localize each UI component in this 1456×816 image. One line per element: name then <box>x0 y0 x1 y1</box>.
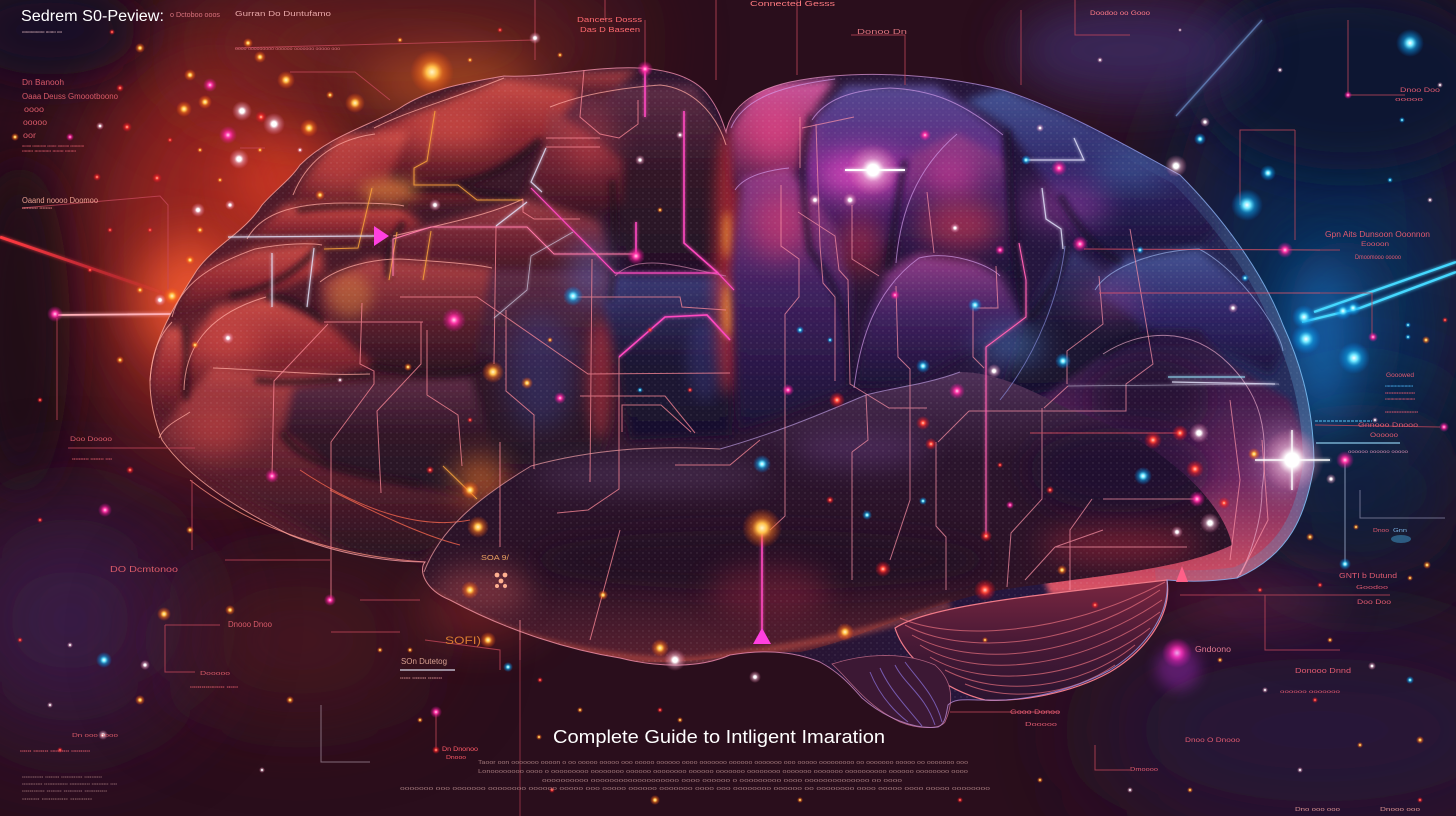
text block: right column: Gnn <box>1393 528 1407 534</box>
text block: right column: Dooooo <box>1025 722 1057 728</box>
text block: left column: oor <box>23 131 36 140</box>
temporal lobe shading <box>430 428 1210 616</box>
text block: right column: Goodoo <box>1356 585 1388 591</box>
text block: top labels: Dancers Dosss <box>577 17 643 24</box>
arrow: bottom up marker <box>753 628 771 644</box>
text block: bottom left lines <box>22 774 118 801</box>
left hemisphere glows <box>179 104 742 504</box>
text block: right column: oooooooooo <box>1385 383 1414 388</box>
text block: right column: Gnnooo Dnooo <box>1358 423 1419 429</box>
nodes: left field <box>11 27 803 805</box>
brain silhouette <box>150 68 1314 727</box>
text block: left column: ooo oooo ooooo ooooo <box>20 748 91 753</box>
text block: top labels: Connected Gesss <box>750 1 836 8</box>
right cyan divider bars <box>1315 421 1400 443</box>
text block: right column <box>1010 88 1441 813</box>
circuit lines <box>228 70 1320 660</box>
temporal lobe <box>424 372 1232 662</box>
text block: right column: Dno ooo ooo <box>1295 807 1340 813</box>
red seam glow between hemispheres <box>714 125 742 395</box>
text block: right column: Dnoo Doo <box>1400 88 1441 94</box>
text block: top labels <box>22 1 1150 51</box>
text block: top labels: ooooooooo oooo oo <box>22 29 63 34</box>
right rim dotted band <box>1155 163 1314 581</box>
text block: left column: Oaaa Deuss Gmoootboono <box>22 92 119 101</box>
text block: left column: ooooo <box>23 118 48 127</box>
arrow: right pointing marker <box>374 226 389 246</box>
text block: lower left callouts: SOFI) <box>445 635 481 647</box>
nodes: inside right hemisphere <box>782 124 1324 609</box>
cerebellum <box>895 580 1168 700</box>
text block: left column: Oaand noooo Doomoo <box>22 196 99 205</box>
text block: left column: DO Dcmtonoo <box>110 565 179 574</box>
text block: right column: Eoooon <box>1361 242 1389 248</box>
text block: left column: ooooooooo ooo <box>190 684 239 689</box>
text block: bottom paragraph: Lonoooooooo oooo o ooooooooo oooooooo oooooo oooooooo oooooo ooooooo oooooooo ooooooo ooooooo oooooooooo oooooo oooooooo oooo <box>478 769 968 775</box>
heading: main caption: Complete Guide to Intligent Imaration <box>553 726 885 747</box>
cerebellum folds <box>900 582 1165 694</box>
brainstem <box>832 655 951 728</box>
circuit: pale highlight lines <box>228 138 1279 386</box>
right lobe highlight arcs <box>731 79 1283 578</box>
small badge shape lower right <box>1391 535 1411 543</box>
pale flare at right rim <box>1255 430 1330 490</box>
circuit: pink thin lines right <box>770 117 1320 590</box>
dark folds between right lobes <box>803 115 1153 385</box>
text block: right column: oooooooooo <box>1385 409 1419 414</box>
lobe highlight arcs <box>150 78 960 572</box>
stipple texture <box>140 60 1320 740</box>
brain outline <box>150 68 1314 727</box>
nodes: right field <box>957 28 1449 803</box>
streak: blue right beam upper <box>1314 262 1456 312</box>
warm bottom edge glow <box>430 592 950 661</box>
text block: lower left callouts: SOn Dutetog <box>401 657 447 666</box>
text block: right column: Dmoomooo ooooo <box>1355 255 1402 261</box>
text block: right column: Gpn Aits Dunsoon Ooonnon <box>1325 230 1430 239</box>
text block: right column: Dnooo ooo <box>1380 807 1420 813</box>
streak: pink horizontal left <box>58 314 172 315</box>
lower right lobe <box>1020 330 1316 595</box>
dark folds between left lobes <box>184 140 614 485</box>
text block: right column: Gndoono <box>1195 645 1232 654</box>
text block: right column: Dnoo <box>1373 528 1389 534</box>
text block: left column: oooo oooooo oooo oooo <box>22 149 76 153</box>
text block: left column: oooo oooooo oooo ooooo oooooo <box>22 144 84 148</box>
text block: bottom left lines: oooooo ooooooo oooooo ooooo oo <box>22 781 118 786</box>
text block: bottom left lines: oooooo oooo oooooo ooooo <box>22 774 103 779</box>
text block: top labels: Doodoo oo Gooo <box>1090 10 1150 17</box>
right hemisphere gyri <box>731 79 1283 430</box>
text block: right column: oooooo ooooooo <box>1280 689 1341 694</box>
text block: top labels: Gurran Do Duntufamo <box>235 9 331 18</box>
magenta arrow markers <box>374 226 1188 644</box>
text block: right column: Dmoooo <box>1130 767 1158 773</box>
text block: left column: oooo <box>24 105 45 114</box>
text block: top labels: Das D Baseen <box>580 27 640 34</box>
text block: bottom paragraph: Taoor oon ooooooo oooon o oo ooooo ooooo ooo ooooo oooooo oooo ooooooo oooooo ooooooo ooo ooooo ooooooooo oo ooooooo ooooo oo ooooooo ooo <box>478 760 968 766</box>
text block: left column: Dnooo Dnoo <box>228 620 273 629</box>
text block: right column: ooooooooo <box>1385 390 1416 395</box>
light streaks <box>0 20 1456 322</box>
text block: left column: Dn Banooh <box>22 78 64 87</box>
text block: right column: ooooooooooo <box>1385 396 1416 401</box>
right hemisphere glows <box>743 101 1311 496</box>
circuit: orange left lines <box>324 111 523 499</box>
text block: lower left callouts: ooo oooo oooo <box>400 675 443 680</box>
text block: right column: ooooo <box>1395 97 1423 103</box>
nodes: inside left hemisphere <box>191 61 996 671</box>
text block: right column: Gooo Donoo <box>1010 709 1061 716</box>
text block: left column: Doo Doooo <box>70 437 113 443</box>
text block: left column: Dnooo <box>446 755 466 761</box>
text block: bottom left lines: oooo oooooo ooooo <box>22 796 94 801</box>
text block: bottom paragraph: ooooooo ooo ooooooo oooooooo oooooo ooooo ooo ooooo oooooo ooooooo oooo ooo oooooooo oooooo oo oooooooo oooo ooooo oooo ooooo oooooooo <box>400 786 990 792</box>
pale flare at upper right hemisphere <box>845 169 905 171</box>
text block: right column: Dnoo O Dnooo <box>1185 737 1240 744</box>
streak: red left beam <box>0 237 172 296</box>
text block: left column: ooooo oooo <box>22 206 52 210</box>
text block: right column: Oooooo <box>1370 433 1399 439</box>
text block: left column: Dn Dnonoo <box>442 746 478 753</box>
text block: left column <box>20 78 478 761</box>
arrow: lower right marker <box>1176 566 1188 582</box>
small rosette icon <box>495 573 507 588</box>
text block: lower left callouts <box>400 555 509 680</box>
text block: bottom paragraph: oooooooooo ooooooooooooooooooo oooo oooooo o ooooooooo oooo oooooooooooooo oo oooo <box>542 778 902 784</box>
text block: right column: oooooo oooooo ooooo <box>1348 449 1409 454</box>
orange seam spots <box>723 211 733 338</box>
text block: left column: Dn ooo oooo <box>72 733 118 739</box>
text block: right column: GNTI b Dutund <box>1339 571 1397 580</box>
streak: blue right beam lower <box>1302 272 1456 322</box>
text block: right column: Gooowed <box>1386 372 1414 379</box>
text block: right column: Donooo Dnnd <box>1295 666 1351 675</box>
text block: top labels: o Dctoboo ooos <box>170 10 220 19</box>
streak: pale diagonal top right <box>1176 20 1262 116</box>
brain lobes clipped to silhouette <box>140 60 1320 740</box>
circuit: magenta lines <box>393 70 1026 636</box>
text block: lower left callouts: SOA 9/ <box>481 555 509 562</box>
text block: top labels: oooo ooooooooo oooooo ooooooo ooooo ooo <box>235 46 341 51</box>
callout bar <box>400 669 455 671</box>
text block: bottom left lines: oooooo oooo ooooo oooooo <box>22 788 108 793</box>
heading: top left title: Sedrem S0-Peview: <box>21 8 164 25</box>
circuit: pink thin lines left <box>272 70 760 660</box>
text block: right column: Doo Doo <box>1357 600 1392 606</box>
text block: top labels: Donoo Dn <box>857 29 907 36</box>
text block: bottom paragraph <box>400 760 990 792</box>
brain outer glow <box>140 59 1346 635</box>
text block: left column: ooooo oooo oo <box>72 456 113 461</box>
text block: left column: Dooooo <box>200 671 230 677</box>
brain illustration <box>140 60 1320 740</box>
left hemisphere gyri <box>150 70 732 560</box>
